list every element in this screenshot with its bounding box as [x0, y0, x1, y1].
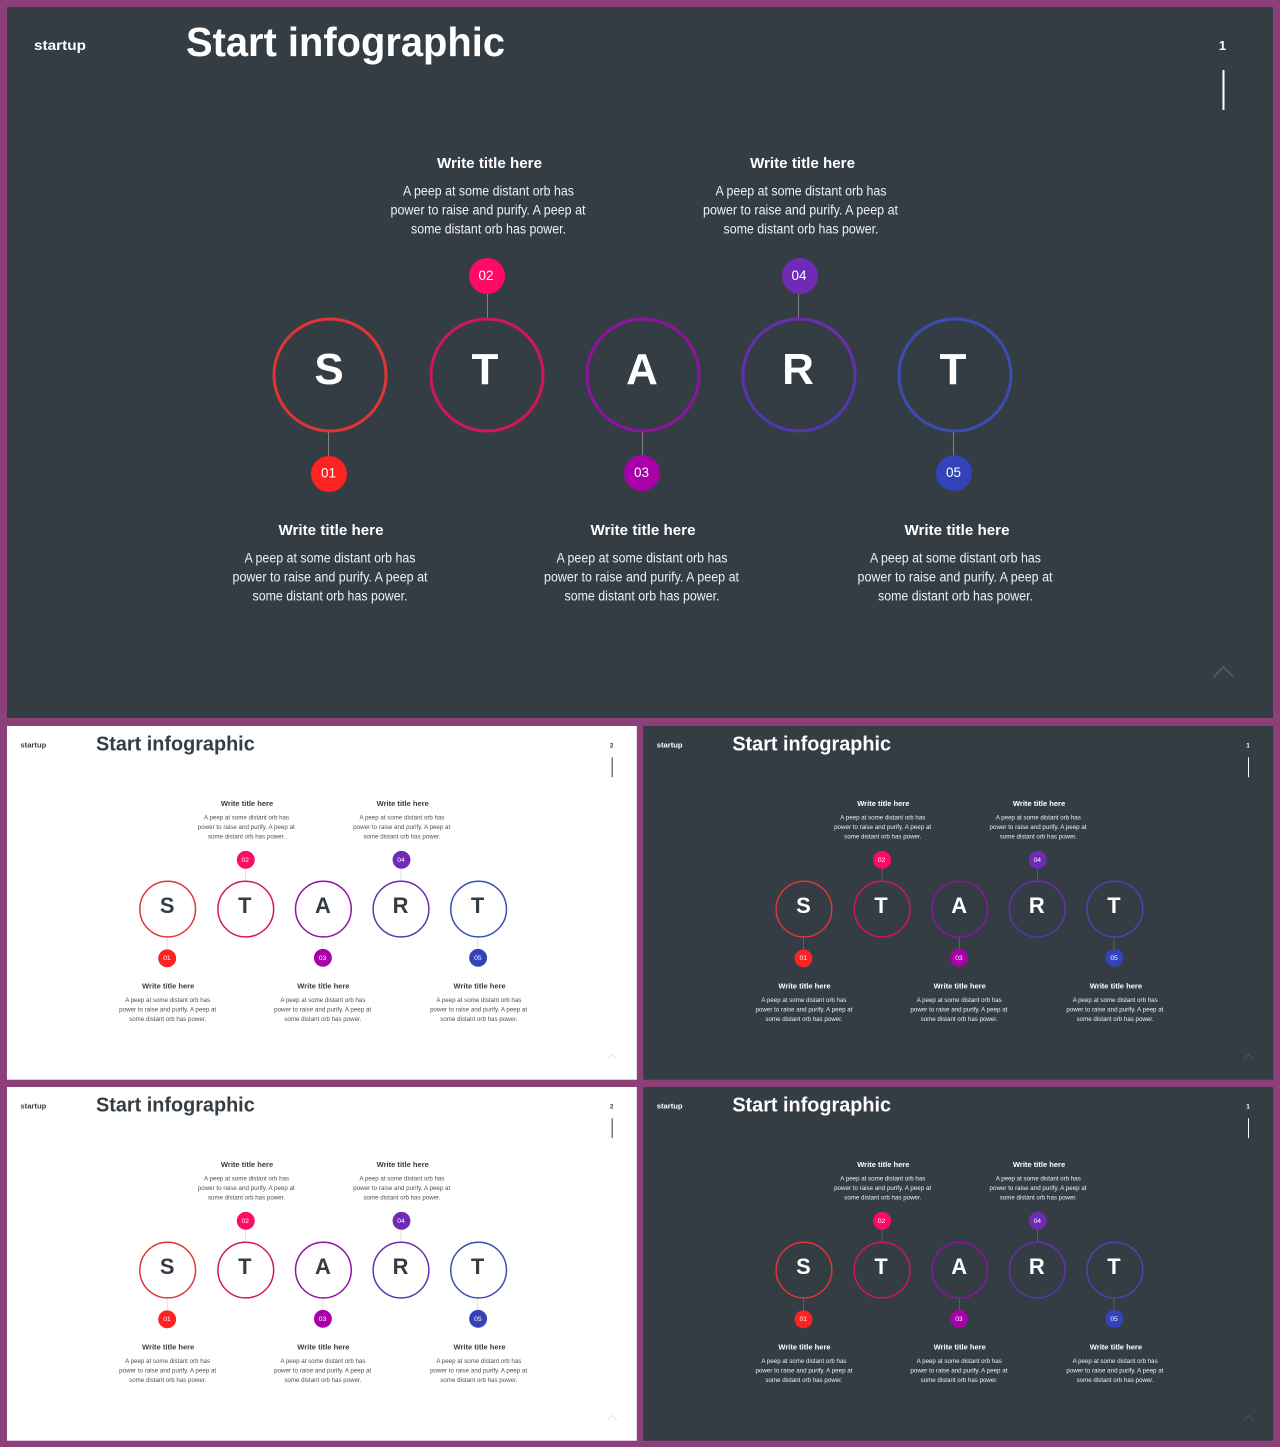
step 04 callout: 04 — [1034, 1218, 1041, 1225]
step 02 callout: power to raise and purify. A peep at — [198, 1185, 295, 1192]
letter ring S — [776, 1242, 832, 1298]
brand label: startup — [20, 1103, 46, 1110]
letter ring T: T — [472, 345, 499, 394]
step 02 callout: 02 — [478, 268, 494, 283]
step 01 callout: 01 — [321, 466, 336, 480]
letter ring S — [140, 1242, 196, 1298]
letter ring T — [431, 319, 543, 431]
step 01 callout: 01 — [163, 955, 171, 962]
page number: 2 — [610, 742, 614, 749]
page marker line — [1222, 70, 1224, 110]
step 02 callout: 02 — [878, 857, 886, 864]
step 05 callout — [1066, 1298, 1164, 1384]
step 03 callout: some distant orb has power. — [284, 1377, 362, 1384]
step 01 callout: 01 — [799, 1316, 807, 1323]
icon: up chevron — [607, 1415, 617, 1420]
letter ring A — [932, 1242, 988, 1298]
step 04 callout — [990, 1160, 1087, 1242]
step 05 callout: 05 — [474, 955, 482, 962]
letter ring R: R — [393, 893, 409, 918]
step 01 callout: some distant orb has power. — [129, 1377, 206, 1384]
step 03 callout: Write title here — [297, 982, 350, 991]
step 04 callout: A peep at some distant orb has — [359, 815, 445, 822]
step 05 callout: Write title here — [453, 982, 506, 991]
step 03 callout: 03 — [319, 1316, 327, 1323]
step 01 callout: 01 — [799, 955, 807, 962]
page number: 2 — [610, 1103, 614, 1110]
step 01 callout: 01 — [163, 1316, 171, 1323]
step 05 callout — [1066, 937, 1164, 1023]
step 05 callout: 05 — [474, 1316, 482, 1323]
step 05 callout: some distant orb has power. — [878, 588, 1033, 604]
page number: 1 — [1246, 742, 1250, 749]
step 01 callout: A peep at some distant orb has — [244, 550, 416, 566]
letter ring R — [1009, 1242, 1065, 1298]
page marker line — [1247, 1118, 1250, 1138]
step 05 callout: Write title here — [1090, 1343, 1142, 1352]
step 05 callout — [430, 937, 527, 1023]
letter ring R — [743, 319, 855, 431]
step 04 callout: Write title here — [1013, 1160, 1065, 1169]
letter ring S: S — [796, 1254, 811, 1279]
step 01 callout — [119, 937, 216, 1023]
letter ring A — [296, 1242, 351, 1298]
step 03 callout — [274, 937, 371, 1023]
step 02 callout: A peep at some distant orb has — [204, 1176, 290, 1183]
page marker line — [611, 757, 614, 777]
brand label: startup — [20, 742, 46, 749]
step 02 callout: A peep at some distant orb has — [204, 815, 290, 822]
letter ring T — [218, 881, 274, 937]
step 01 callout: power to raise and purify. A peep at — [755, 1007, 853, 1014]
step 02 callout — [198, 799, 295, 881]
step 02 callout: power to raise and purify. A peep at — [390, 202, 586, 218]
step 04 callout: power to raise and purify. A peep at — [353, 1185, 450, 1192]
step 02 callout: some distant orb has power. — [411, 222, 566, 236]
step 01 callout — [232, 432, 428, 604]
step 02 callout: some distant orb has power. — [208, 833, 285, 840]
step 05 callout: some distant orb has power. — [1077, 1377, 1154, 1384]
letter ring R — [373, 881, 429, 937]
step 05 callout: A peep at some distant orb has — [1073, 997, 1158, 1004]
step 02 callout: some distant orb has power. — [844, 833, 922, 840]
step 04 callout — [990, 799, 1087, 881]
step 03 callout: A peep at some distant orb has — [280, 1358, 366, 1365]
panel: small dark slide, row 1 — [643, 726, 1273, 1080]
step 01 callout: Write title here — [778, 1343, 831, 1352]
step 01 callout: power to raise and purify. A peep at — [119, 1368, 216, 1375]
step 04 callout: some distant orb has power. — [363, 1194, 441, 1201]
step 03 callout: 03 — [634, 465, 649, 480]
step 03 callout — [910, 937, 1008, 1023]
step 02 callout: 02 — [242, 857, 249, 864]
step 02 callout: Write title here — [221, 1160, 273, 1169]
step 05 callout: A peep at some distant orb has — [1073, 1358, 1158, 1365]
step 03 callout: power to raise and purify. A peep at — [274, 1007, 371, 1014]
title: Start infographic — [96, 733, 255, 755]
step 02 callout — [198, 1160, 295, 1242]
step 03 callout: power to raise and purify. A peep at — [274, 1368, 371, 1375]
title: Start infographic — [732, 1094, 891, 1116]
step 02 callout: Write title here — [221, 799, 273, 808]
step 03 callout: 03 — [955, 955, 963, 962]
letter ring T: T — [874, 1254, 888, 1279]
letter ring T — [451, 1242, 506, 1298]
step 02 callout: power to raise and purify. A peep at — [834, 1185, 931, 1192]
step 02 callout: 02 — [242, 1218, 249, 1225]
title: Start infographic — [732, 733, 891, 755]
step 05 callout: power to raise and purify. A peep at — [1066, 1007, 1164, 1014]
step 02 callout: A peep at some distant orb has — [840, 815, 926, 822]
step 03 callout: 03 — [955, 1316, 963, 1323]
letter ring A: A — [951, 1254, 967, 1279]
letter ring S: S — [314, 345, 344, 394]
step 03 callout: some distant orb has power. — [921, 1016, 998, 1023]
step 05 callout: power to raise and purify. A peep at — [430, 1368, 527, 1375]
icon: up chevron — [1244, 1415, 1253, 1420]
step 04 callout: Write title here — [1013, 799, 1065, 808]
letter ring T: T — [471, 893, 485, 918]
step 03 callout: some distant orb has power. — [921, 1377, 998, 1384]
step 01 callout: Write title here — [778, 982, 831, 991]
brand label: startup — [34, 37, 86, 53]
step 01 callout: A peep at some distant orb has — [761, 1358, 847, 1365]
step 01 callout: some distant orb has power. — [129, 1016, 206, 1023]
step 02 callout: Write title here — [857, 1160, 909, 1169]
step 01 callout — [755, 1298, 853, 1384]
step 03 callout: A peep at some distant orb has — [556, 550, 728, 566]
letter ring T — [218, 1242, 274, 1298]
letter ring T: T — [238, 893, 252, 918]
panel: small light slide, row 2 — [7, 1087, 637, 1441]
step 01 callout: some distant orb has power. — [765, 1377, 843, 1384]
step 04 callout: some distant orb has power. — [1000, 833, 1077, 840]
letter ring A: A — [626, 345, 658, 394]
letter ring R — [1009, 881, 1065, 937]
step 04 callout — [353, 799, 450, 881]
step 05 callout — [858, 432, 1053, 604]
step 02 callout: A peep at some distant orb has — [403, 184, 574, 198]
letter ring T — [451, 881, 506, 937]
step 02 callout: some distant orb has power. — [208, 1194, 285, 1201]
letter ring R: R — [1029, 1254, 1045, 1279]
step 01 callout: power to raise and purify. A peep at — [119, 1007, 216, 1014]
step 01 callout: some distant orb has power. — [765, 1016, 843, 1023]
step 05 callout: some distant orb has power. — [440, 1377, 518, 1384]
step 02 callout: power to raise and purify. A peep at — [834, 824, 931, 831]
letter ring T: T — [1107, 893, 1121, 918]
letter ring T — [854, 1242, 910, 1298]
step 02 callout — [834, 799, 931, 881]
step 01 callout — [755, 937, 853, 1023]
step 04 callout: power to raise and purify. A peep at — [353, 824, 450, 831]
step 03 callout: Write title here — [297, 1343, 350, 1352]
step 05 callout: A peep at some distant orb has — [870, 550, 1041, 566]
step 05 callout: Write title here — [1090, 982, 1142, 991]
letter ring T — [854, 881, 910, 937]
step 01 callout: some distant orb has power. — [252, 588, 408, 604]
step 05 callout: 05 — [1110, 1316, 1118, 1323]
panel: small light slide, row 1 — [7, 726, 637, 1080]
letter ring A: A — [315, 893, 331, 918]
step 04 callout — [353, 1160, 450, 1242]
step 04 callout: Write title here — [750, 155, 855, 172]
step 05 callout: some distant orb has power. — [1077, 1016, 1154, 1023]
step 03 callout: A peep at some distant orb has — [917, 1358, 1002, 1365]
page number: 1 — [1246, 1103, 1250, 1110]
letter ring T — [899, 319, 1011, 431]
letter ring T — [1087, 1242, 1143, 1298]
step 05 callout: power to raise and purify. A peep at — [1066, 1368, 1164, 1375]
step 04 callout: power to raise and purify. A peep at — [990, 1185, 1087, 1192]
letter ring S: S — [796, 893, 811, 918]
step 02 callout: 02 — [878, 1218, 886, 1225]
step 05 callout: 05 — [1110, 955, 1118, 962]
letter ring T — [1087, 881, 1143, 937]
step 01 callout — [119, 1298, 216, 1384]
step 05 callout: some distant orb has power. — [440, 1016, 518, 1023]
step 05 callout: power to raise and purify. A peep at — [858, 570, 1053, 584]
letter ring S: S — [160, 893, 174, 918]
step 05 callout — [430, 1298, 527, 1384]
letter ring A — [587, 319, 699, 431]
letter ring T: T — [238, 1254, 252, 1279]
step 03 callout — [544, 432, 739, 604]
step 04 callout: 04 — [1034, 857, 1041, 864]
letter ring S — [776, 881, 832, 937]
step 03 callout: Write title here — [590, 522, 696, 539]
step 03 callout: power to raise and purify. A peep at — [544, 570, 739, 584]
title: Start infographic — [186, 19, 505, 65]
brand label: startup — [657, 742, 683, 749]
step 03 callout: power to raise and purify. A peep at — [910, 1007, 1008, 1014]
step 04 callout: A peep at some distant orb has — [996, 815, 1081, 822]
step 04 callout: A peep at some distant orb has — [359, 1176, 445, 1183]
step 05 callout: Write title here — [904, 522, 1010, 539]
title: Start infographic — [96, 1094, 255, 1116]
step 03 callout: A peep at some distant orb has — [280, 997, 366, 1004]
step 01 callout: A peep at some distant orb has — [125, 997, 211, 1004]
step 02 callout: some distant orb has power. — [844, 1194, 922, 1201]
step 01 callout: A peep at some distant orb has — [125, 1358, 211, 1365]
letter ring T: T — [1107, 1254, 1121, 1279]
page marker line — [1247, 757, 1250, 777]
letter ring S — [274, 319, 386, 431]
icon: up chevron — [1214, 667, 1234, 677]
step 01 callout: Write title here — [142, 982, 194, 991]
step 01 callout: power to raise and purify. A peep at — [232, 570, 428, 584]
step 02 callout — [390, 155, 586, 318]
step 02 callout: Write title here — [437, 155, 542, 172]
letter ring R: R — [393, 1254, 409, 1279]
letter ring R: R — [782, 345, 814, 394]
step 03 callout: some distant orb has power. — [284, 1016, 362, 1023]
step 03 callout: Write title here — [934, 982, 986, 991]
step 03 callout — [910, 1298, 1008, 1384]
step 04 callout: some distant orb has power. — [724, 222, 878, 236]
step 01 callout: power to raise and purify. A peep at — [755, 1368, 853, 1375]
step 01 callout: Write title here — [278, 522, 384, 539]
icon: up chevron — [1244, 1054, 1253, 1059]
letter ring A: A — [951, 893, 967, 918]
step 05 callout: A peep at some distant orb has — [436, 1358, 522, 1365]
letter ring R: R — [1029, 893, 1045, 918]
page marker line — [611, 1118, 614, 1138]
brand label: startup — [657, 1103, 683, 1110]
step 02 callout: power to raise and purify. A peep at — [198, 824, 295, 831]
step 04 callout: A peep at some distant orb has — [996, 1176, 1081, 1183]
letter ring A — [932, 881, 988, 937]
icon: up chevron — [607, 1054, 617, 1059]
page number: 1 — [1219, 38, 1226, 53]
step 04 callout — [703, 155, 898, 318]
step 03 callout: power to raise and purify. A peep at — [910, 1368, 1008, 1375]
letter ring T: T — [940, 345, 967, 394]
step 03 callout: some distant orb has power. — [564, 588, 720, 604]
letter ring A — [296, 881, 351, 937]
step 04 callout: Write title here — [377, 1160, 429, 1169]
letter ring A: A — [315, 1254, 331, 1279]
step 05 callout: power to raise and purify. A peep at — [430, 1007, 527, 1014]
step 04 callout: A peep at some distant orb has — [716, 184, 887, 198]
step 05 callout: A peep at some distant orb has — [436, 997, 522, 1004]
panel: large dark slide — [7, 7, 1273, 718]
letter ring S: S — [160, 1254, 174, 1279]
step 03 callout — [274, 1298, 371, 1384]
step 04 callout: 04 — [791, 268, 807, 283]
step 02 callout — [834, 1160, 931, 1242]
letter ring R — [373, 1242, 429, 1298]
letter ring T: T — [471, 1254, 485, 1279]
step 01 callout: A peep at some distant orb has — [761, 997, 847, 1004]
letter ring T: T — [874, 893, 888, 918]
step 02 callout: Write title here — [857, 799, 909, 808]
step 04 callout: some distant orb has power. — [1000, 1194, 1077, 1201]
step 04 callout: some distant orb has power. — [363, 833, 441, 840]
step 05 callout: Write title here — [453, 1343, 506, 1352]
panel: small dark slide, row 2 — [643, 1087, 1273, 1441]
step 04 callout: power to raise and purify. A peep at — [703, 202, 898, 218]
step 05 callout: 05 — [946, 465, 961, 480]
step 04 callout: power to raise and purify. A peep at — [990, 824, 1087, 831]
step 02 callout: A peep at some distant orb has — [840, 1176, 926, 1183]
step 04 callout: 04 — [397, 1218, 405, 1225]
letter ring S — [140, 881, 196, 937]
step 03 callout: Write title here — [934, 1343, 986, 1352]
step 04 callout: 04 — [397, 857, 405, 864]
step 04 callout: Write title here — [377, 799, 429, 808]
step 03 callout: A peep at some distant orb has — [917, 997, 1002, 1004]
step 01 callout: Write title here — [142, 1343, 194, 1352]
step 03 callout: 03 — [319, 955, 327, 962]
